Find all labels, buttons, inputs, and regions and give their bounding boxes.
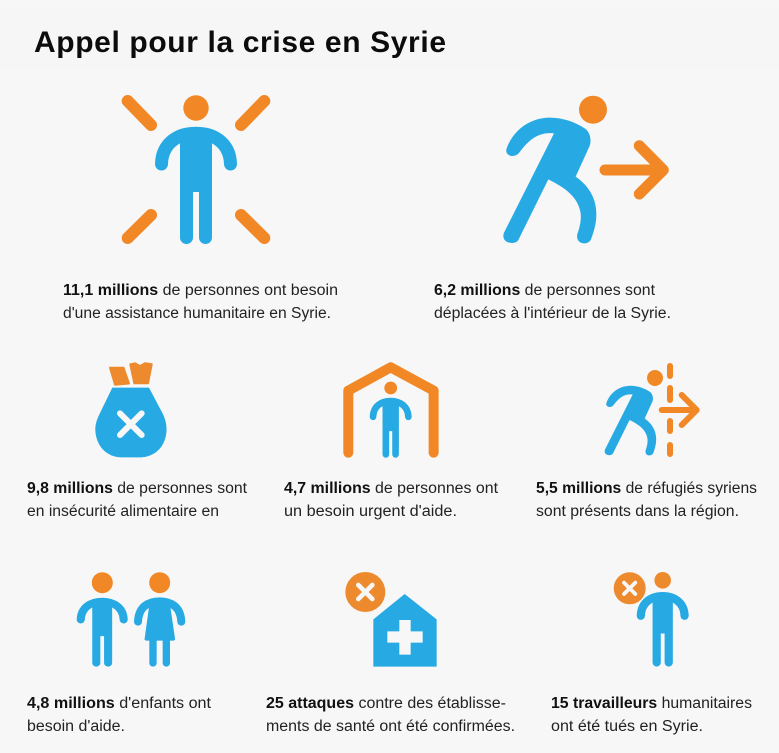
text: 9,8 millions: en insécurité alimentaire en bbox=[27, 503, 219, 520]
text: 11,1 millions: 11,1 millions de personnes ont besoin bbox=[63, 282, 338, 299]
text: 5,5 millions: 5,5 millions de réfugiés syriens bbox=[536, 480, 757, 497]
text: 4,8 millions bbox=[27, 695, 212, 735]
text: 11,1 millions: d'une assistance humanitaire en Syrie. bbox=[63, 305, 331, 322]
panel: 5,5 millions refugees bbox=[536, 366, 757, 520]
text: 9,8 millions: 9,8 millions de personnes sont bbox=[27, 480, 248, 497]
icon: food sack with cross bbox=[95, 363, 167, 457]
text: 4,8 millions: 4,8 millions d'enfants ont bbox=[27, 695, 212, 712]
panel: 11,1 millions need assistance bbox=[63, 95, 338, 322]
icon: boy and girl bbox=[81, 572, 181, 667]
panel: 4,8 millions children bbox=[27, 572, 212, 735]
text: 4,7 millions bbox=[284, 480, 499, 520]
panel: 15 aid workers killed bbox=[551, 572, 752, 735]
panel: 9,8 millions food insecure bbox=[27, 363, 248, 520]
icon: hospital with cross mark bbox=[345, 572, 437, 667]
text: 25 attaques: 25 attaques contre des établisse- bbox=[266, 695, 506, 712]
text: 25 attaques: ments de santé ont été confirmées. bbox=[266, 718, 515, 735]
text: 5,5 millions bbox=[536, 480, 757, 520]
panel: 25 attacks on health facilities bbox=[266, 572, 515, 735]
title: Appel pour la crise en Syrie bbox=[34, 26, 446, 59]
text: 4,8 millions: besoin d'aide. bbox=[27, 718, 125, 735]
text: 25 attaques bbox=[266, 695, 515, 735]
icon: person with radiating lines bbox=[128, 95, 264, 244]
icon: person crossing a border bbox=[605, 366, 697, 455]
panel: 6,2 millions displaced bbox=[434, 96, 671, 322]
text: 15 travailleurs bbox=[551, 695, 752, 735]
text: 5,5 millions: sont présents dans la région. bbox=[536, 503, 739, 520]
panel: 4,7 millions urgent need bbox=[284, 367, 499, 520]
text: 4,7 millions: 4,7 millions de personnes ont bbox=[284, 480, 499, 497]
text: 9,8 millions bbox=[27, 480, 248, 520]
text: 15 travailleurs: ont été tués en Syrie. bbox=[551, 718, 703, 735]
icon: person under shelter bbox=[348, 367, 434, 458]
text: 11,1 millions bbox=[63, 282, 338, 322]
text: 6,2 millions: 6,2 millions de personnes sont bbox=[434, 282, 656, 299]
text: 6,2 millions: déplacées à l'intérieur de la Syrie. bbox=[434, 305, 671, 322]
icon: running person with arrow bbox=[503, 96, 663, 243]
text: 4,7 millions: un besoin urgent d'aide. bbox=[284, 503, 457, 520]
text: 6,2 millions bbox=[434, 282, 671, 322]
text: 15 travailleurs: 15 travailleurs humanitaires bbox=[551, 695, 752, 712]
icon: person with cross mark bbox=[614, 572, 685, 667]
